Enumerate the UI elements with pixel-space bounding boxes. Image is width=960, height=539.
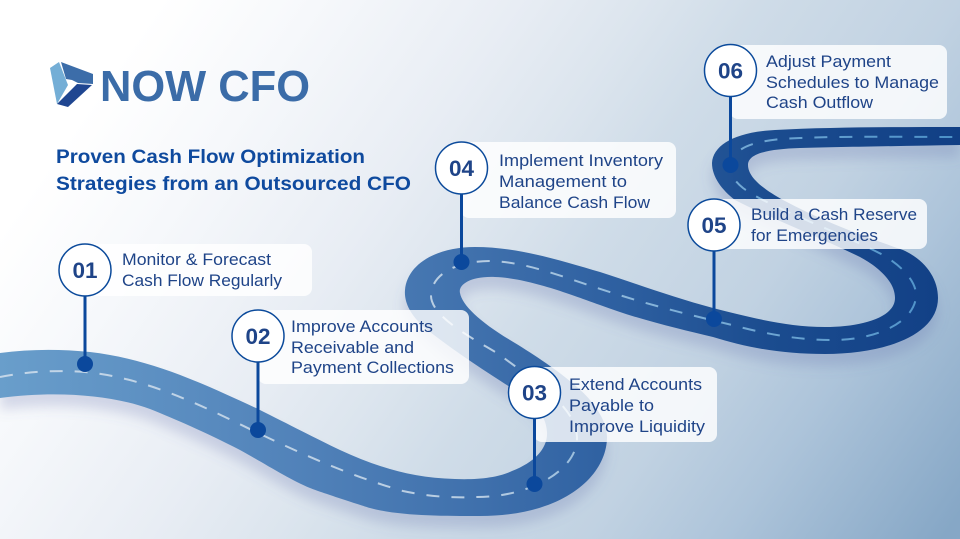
road shadow [0, 139, 960, 528]
winding road [0, 127, 960, 528]
logo: NOW CFO [50, 62, 310, 111]
road centre dashes [0, 137, 960, 497]
step 04: 04 [449, 156, 474, 181]
step 02 [232, 310, 469, 438]
title: Proven Cash Flow Optimization [56, 147, 365, 168]
step 05: for Emergencies [751, 227, 878, 245]
step 05 [688, 199, 927, 327]
step 03: Extend Accounts [569, 376, 702, 394]
step 02: 02 [245, 324, 271, 349]
step 01: Monitor & Forecast [122, 251, 271, 269]
step 02: Payment Collections [291, 359, 454, 377]
step 04: Management to [499, 173, 627, 191]
step 06: Cash Outflow [766, 94, 873, 112]
step 03: Payable to [569, 397, 654, 415]
step 06: Adjust Payment [766, 53, 891, 71]
step 06 [704, 44, 947, 173]
step 04 [436, 142, 676, 270]
icon: logo mark [50, 62, 93, 107]
title: Strategies from an Outsourced CFO [56, 174, 411, 195]
road surface [0, 127, 960, 516]
step 03: 03 [522, 380, 547, 406]
step 03 [508, 366, 717, 492]
title [56, 147, 411, 195]
step 06: Schedules to Manage [766, 74, 939, 92]
step 01: Cash Flow Regularly [122, 272, 283, 290]
step 02: Improve Accounts [291, 318, 433, 336]
logo wordmark: NOW CFO [100, 62, 310, 111]
step 05: Build a Cash Reserve [751, 206, 917, 224]
step 01: 01 [72, 258, 98, 283]
step 04: Implement Inventory [499, 152, 664, 170]
step 05: 05 [701, 213, 727, 238]
step 01 [59, 244, 312, 372]
step 03: Improve Liquidity [569, 418, 706, 436]
step 02: Receivable and [291, 339, 414, 357]
step 06: 06 [718, 58, 743, 84]
step 04: Balance Cash Flow [499, 194, 650, 212]
